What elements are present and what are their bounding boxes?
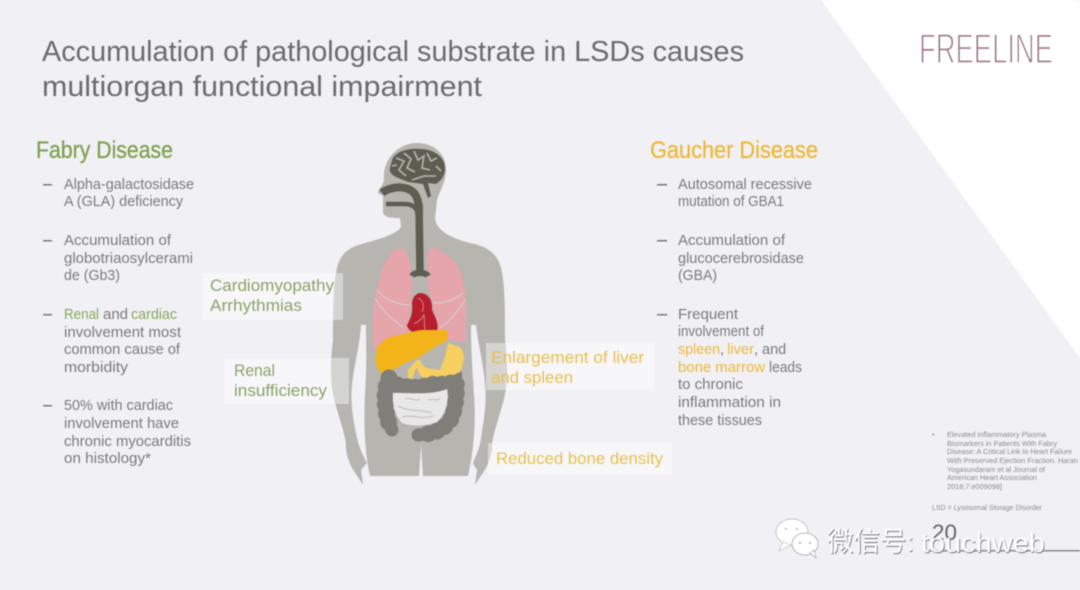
- callout: Cardiomyopathy Arrhythmias: [202, 273, 343, 320]
- callout: Reduced bone density: [488, 443, 672, 475]
- bullet: GBA1 mutation: [657, 177, 812, 210]
- bullet: spleen, liver, bone marrow: Frequent: [678, 307, 738, 323]
- page number: 20: [932, 520, 957, 545]
- callout: Enlargement of liver and spleen: Enlargement of liver: [491, 348, 644, 367]
- bullet: renal and cardiac involvement: and: [103, 307, 128, 323]
- bullet: glucocerebrosidase accumulation: glucocerebrosidase: [678, 251, 804, 267]
- bullet: renal and cardiac involvement: involvement most: [64, 325, 181, 341]
- bullet: spleen, liver, bone marrow: leads: [769, 360, 802, 376]
- callout: Cardiomyopathy Arrhythmias: Arrhythmias: [210, 296, 302, 315]
- bullet: renal and cardiac involvement: [43, 307, 181, 376]
- footnote: reference: Biomarkers in Patients With Fabry: [947, 441, 1058, 448]
- bullet: Gb3 accumulation: [43, 233, 193, 284]
- heading: Fabry Disease: Fabry Disease: [36, 137, 173, 164]
- bullet: glucocerebrosidase accumulation: (GBA): [678, 268, 717, 284]
- airway: [382, 187, 428, 276]
- footnote: reference: American Heart Association: [947, 475, 1037, 482]
- colon: [385, 378, 456, 435]
- heart: [407, 293, 438, 335]
- callout: Enlargement of liver and spleen: and spleen: [491, 368, 573, 387]
- bullet: GLA deficiency: A (GLA) deficiency: [64, 194, 184, 210]
- bullet: chronic myocarditis: involvement have: [64, 416, 179, 432]
- bullet: spleen, liver, bone marrow: ,: [720, 342, 724, 358]
- bullet: glucocerebrosidase accumulation: [657, 233, 804, 284]
- footnote: reference: [932, 432, 1078, 512]
- watermark: WeChat ID: 微信号:: [827, 527, 914, 557]
- stomach: [408, 343, 464, 383]
- small intestine: [393, 389, 448, 426]
- title: multiorgan functional impairment: [42, 71, 482, 103]
- bullet: Gb3 accumulation: Accumulation of: [64, 233, 172, 249]
- bullet: GBA1 mutation: mutation of GBA1: [678, 194, 784, 210]
- bullet: renal and cardiac involvement: common cause of: [64, 342, 181, 358]
- footnote: reference: LSD = Lysosomal Storage Disorder: [932, 505, 1043, 512]
- footnote: reference: Yogasundaram et al Journal of: [947, 467, 1045, 474]
- bullet: GBA1 mutation: Autosomal recessive: [678, 177, 812, 193]
- watermark: WeChat ID: [827, 527, 1046, 559]
- callout: Reduced bone density: Reduced bone density: [496, 449, 663, 468]
- bullet: chronic myocarditis: on histology*: [64, 451, 151, 467]
- title: [42, 36, 744, 103]
- bullet: renal and cardiac involvement: morbidity: [64, 360, 129, 376]
- bullet: spleen, liver, bone marrow: inflammation in: [678, 395, 781, 411]
- bullet: chronic myocarditis: [43, 398, 191, 467]
- callout: Renal insufficiency: insufficiency: [234, 381, 327, 400]
- footnote: reference: Elevated Inflammatory Plasma: [947, 432, 1046, 439]
- watermark: WeChat icon: [776, 519, 818, 558]
- panel: Fabry Disease: [36, 137, 194, 467]
- bullet: spleen, liver, bone marrow: , and: [754, 342, 786, 358]
- bullet: spleen, liver, bone marrow: spleen: [678, 342, 720, 358]
- bullet: chronic myocarditis: chronic myocarditis: [64, 434, 191, 450]
- brain: [390, 149, 445, 198]
- bullet: Gb3 accumulation: de (Gb3): [64, 268, 120, 284]
- footnote: reference: Disease: A Critical Link to Heart Failure: [947, 449, 1072, 456]
- callout: Cardiomyopathy Arrhythmias: Cardiomyopathy: [210, 276, 335, 295]
- bullet: spleen, liver, bone marrow: these tissues: [678, 413, 762, 429]
- bullet: spleen, liver, bone marrow: involvement of: [678, 324, 765, 340]
- heading: Gaucher Disease: Gaucher Disease: [650, 137, 818, 164]
- liver: [375, 330, 448, 373]
- footnote: reference: With Preserved Ejection Fraction. Haran: [947, 458, 1078, 465]
- watermark: WeChat ID: 微信号:: [828, 528, 915, 558]
- bullet: spleen, liver, bone marrow: to chronic: [678, 377, 743, 393]
- bullet: GLA deficiency: [43, 177, 194, 210]
- lungs: [373, 247, 466, 350]
- bullet: Gb3 accumulation: globotriaosylcerami: [64, 251, 193, 267]
- bullet: chronic myocarditis: 50% with cardiac: [64, 398, 173, 414]
- bullet: spleen, liver, bone marrow: bone marrow: [678, 360, 766, 376]
- callout: Renal insufficiency: Renal: [234, 361, 275, 380]
- callout: Enlargement of liver and spleen: [486, 343, 655, 390]
- bullet: spleen, liver, bone marrow: [657, 307, 802, 429]
- watermark: WeChat ID: touchweb: [922, 529, 1046, 559]
- bullet: spleen, liver, bone marrow: liver: [727, 342, 754, 358]
- body diagram: [331, 143, 507, 485]
- title: Accumulation of pathological substrate in LSDs causes: [42, 36, 744, 68]
- watermark: WeChat ID: touchweb: [921, 528, 1045, 558]
- callout: Renal insufficiency: [224, 358, 349, 404]
- footnote: reference: 2018;7:e009098]: [947, 484, 1002, 491]
- panel: Gaucher Disease: [650, 137, 818, 429]
- footnote: reference: •: [932, 432, 935, 439]
- bullet: renal and cardiac involvement: cardiac: [131, 307, 177, 323]
- bullet: glucocerebrosidase accumulation: Accumulation of: [678, 233, 786, 249]
- bullet: GLA deficiency: Alpha-galactosidase: [64, 177, 194, 193]
- body silhouette: [331, 143, 507, 485]
- bullet: renal and cardiac involvement: Renal: [64, 307, 99, 323]
